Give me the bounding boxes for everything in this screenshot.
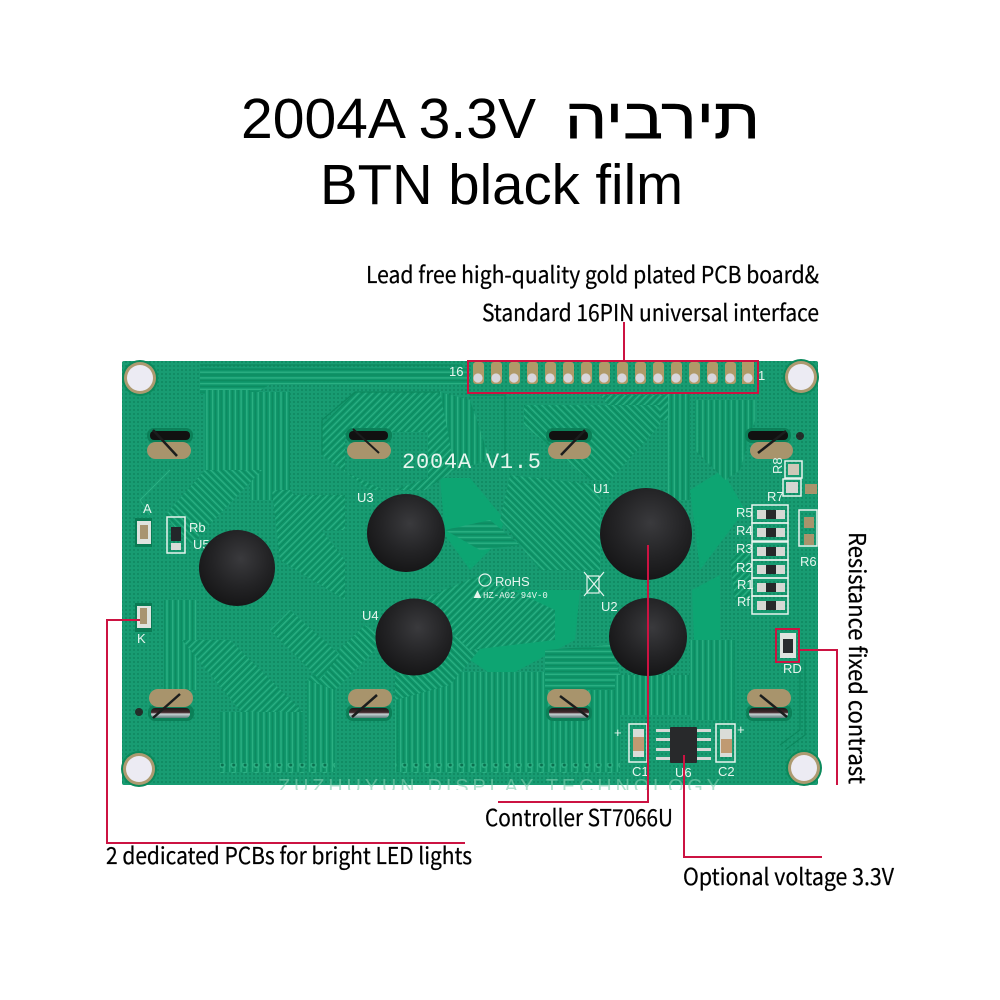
silkscreen: component labels: U4: [362, 608, 379, 623]
mounting holes: [121, 359, 822, 787]
callout: LED PCBs: [106, 620, 472, 871]
callout: LED PCBs: 2 dedicated PCBs for bright LED lights: [106, 837, 472, 871]
capacitors C1 and C2: [629, 724, 735, 762]
silkscreen: component labels: R7: [767, 489, 784, 504]
silkscreen: component labels: +: [737, 722, 745, 737]
PCB board photo: [121, 359, 822, 798]
silkscreen: component labels: R2: [736, 560, 753, 575]
silkscreen: component labels: U1: [593, 481, 610, 496]
title: תירביה: [565, 87, 760, 151]
pads R8 and R6: [783, 461, 817, 546]
silkscreen: component labels: 16: [449, 364, 463, 379]
silkscreen: component labels: +: [614, 725, 622, 740]
callout: optional voltage: Optional voltage 3.3V: [683, 858, 895, 892]
silkscreen: component labels: C2: [718, 764, 735, 779]
16-pin gold header pads: [473, 362, 754, 384]
epoxy blob U3: [367, 494, 445, 572]
infographic canvas: [106, 98, 894, 892]
silkscreen: component labels: [137, 364, 817, 780]
silkscreen: component labels: R4: [736, 523, 753, 538]
LED frame slots, top row: [147, 428, 804, 459]
board substrate: [122, 361, 818, 785]
resistor bank R5 to Rf: [752, 505, 788, 614]
LED contacts, left side: [135, 517, 185, 632]
silkscreen: component labels: R8: [770, 457, 785, 474]
RoHS and recycling marks: [479, 572, 604, 596]
callout: controller: [485, 545, 673, 833]
LED frame slots, bottom row: [135, 689, 792, 721]
callout: resistance fixed contrast: [776, 532, 876, 785]
silkscreen: component labels: U5: [193, 537, 210, 552]
silkscreen: component labels: Rb: [189, 520, 206, 535]
silkscreen: component labels: U3: [357, 490, 374, 505]
copper-free light zones: [440, 470, 745, 680]
silkscreen: component labels: K: [137, 631, 146, 646]
silkscreen: component labels: ▲: [471, 586, 484, 601]
callout: gold plated PCB and 16PIN interface: Standard 16PIN universal interface: [482, 294, 819, 328]
trace bundles: [140, 365, 805, 773]
epoxy blob U5: [199, 530, 275, 606]
silkscreen: component labels: R5: [736, 505, 753, 520]
callout: gold plated PCB and 16PIN interface: [366, 256, 819, 393]
silkscreen: component labels: Rf: [737, 594, 750, 609]
silkscreen: component labels: U2: [601, 599, 618, 614]
callout: resistance fixed contrast: Resistance fixed contrast: [842, 532, 876, 784]
silkscreen: component labels: U6: [675, 765, 692, 780]
silkscreen: board name: 2004A V1.5: [402, 450, 541, 475]
silkscreen: component labels: R3: [736, 541, 753, 556]
epoxy blob U2: [609, 598, 687, 676]
silkscreen: component labels: RD: [783, 661, 802, 676]
callout: optional voltage: [683, 755, 895, 892]
silkscreen: component labels: R6: [800, 554, 817, 569]
callout: controller: Controller ST7066U: [485, 799, 673, 833]
callout: gold plated PCB and 16PIN interface: Lead free high-quality gold plated PCB board&: [366, 256, 819, 290]
silkscreen: component labels: RoHS: [495, 574, 530, 589]
title: BTN black film: [320, 153, 683, 217]
epoxy blob U1: [600, 488, 692, 580]
silkscreen: component labels: R1: [737, 577, 754, 592]
silkscreen: component labels: C1: [632, 764, 649, 779]
title: 2004A 3.3V: [241, 87, 536, 151]
epoxy blob U4: [376, 598, 452, 676]
regulator chip U6: [656, 727, 711, 763]
watermark: ZUZHUYUN DISPLAY TECHNOLOGY: [278, 776, 720, 798]
silkscreen: component labels: 1: [758, 368, 765, 383]
silkscreen: component labels: A: [143, 501, 152, 516]
title: [241, 87, 760, 217]
resistor RD: [780, 633, 796, 658]
silkscreen: component labels: HZ-A02 94V-0: [483, 591, 548, 601]
